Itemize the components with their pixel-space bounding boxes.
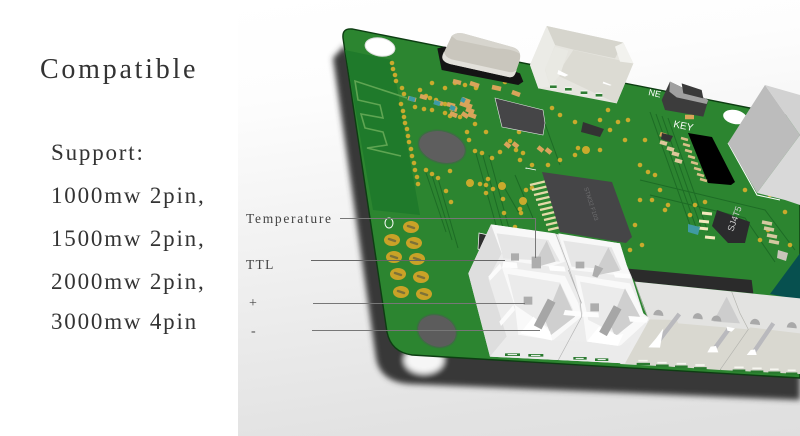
small pins xyxy=(511,253,599,311)
leader line: minus xyxy=(312,330,540,332)
SOIC marking text: SJ4T5 xyxy=(725,205,744,233)
socket D xyxy=(575,275,648,346)
QFP main chip xyxy=(526,168,632,243)
transistor black xyxy=(478,233,496,254)
gold vias xyxy=(392,62,790,250)
front band xyxy=(490,335,632,363)
crystal xyxy=(437,33,523,85)
crystal can top shade xyxy=(452,33,519,53)
gold pads xyxy=(384,221,432,300)
QFN chip xyxy=(495,98,545,135)
antenna keep-out area xyxy=(345,50,420,215)
beige connector row xyxy=(620,253,800,374)
socket A xyxy=(491,224,565,267)
long pins xyxy=(538,301,618,334)
chip marking text: STM32 F103 xyxy=(582,187,599,222)
net silkscreen text: NE xyxy=(648,87,662,100)
left face xyxy=(468,224,507,357)
item 1000mw: 1000mw 2pin, xyxy=(51,183,206,208)
block outline xyxy=(468,224,650,363)
cyan capacitors xyxy=(409,98,698,231)
item 1500mw: 1500mw 2pin, xyxy=(51,226,206,251)
metal disc upper xyxy=(415,125,469,169)
slots xyxy=(488,263,515,326)
divider lines xyxy=(623,282,748,370)
capacitor grey xyxy=(777,250,788,261)
large vias xyxy=(470,150,586,201)
antenna trace xyxy=(355,81,407,156)
crystal base xyxy=(437,47,523,85)
key silkscreen text: KEY xyxy=(672,119,695,134)
capacitor teal xyxy=(688,224,700,235)
silkscreen ring xyxy=(385,218,393,228)
inner wall xyxy=(713,297,740,323)
connector top surface xyxy=(620,282,800,373)
pin bases xyxy=(648,327,757,355)
notches xyxy=(653,310,797,328)
pads xyxy=(505,355,608,360)
label: TTL: TTL xyxy=(246,257,275,272)
black headers behind connectors xyxy=(625,268,753,293)
label: plus: + xyxy=(249,296,257,311)
support list xyxy=(51,140,206,334)
grey relay box xyxy=(728,85,800,205)
tactile button xyxy=(648,82,708,134)
crystal can xyxy=(442,33,520,77)
small resistors xyxy=(408,81,694,153)
label: minus: - xyxy=(251,324,256,339)
support heading: Support: xyxy=(51,140,145,165)
resistor column xyxy=(660,142,682,162)
item 2000mw: 2000mw 2pin, xyxy=(51,269,206,294)
crystal can rim xyxy=(442,52,517,77)
socket B xyxy=(558,233,630,277)
leader line: TTL xyxy=(311,260,505,262)
board shadow xyxy=(333,45,800,400)
pins xyxy=(657,314,773,352)
circuit board xyxy=(343,26,800,378)
connector face right xyxy=(721,327,800,374)
copper traces xyxy=(425,110,795,262)
pads xyxy=(637,361,797,374)
metal disc lower xyxy=(413,309,461,353)
leader line: plus xyxy=(313,302,525,304)
white silk line of box xyxy=(728,143,780,200)
connector pads xyxy=(550,87,602,95)
small SOT xyxy=(661,133,673,142)
white JST connector block xyxy=(468,224,650,363)
connector face left xyxy=(623,319,748,370)
SOT chip xyxy=(581,122,604,137)
mounting hole top right xyxy=(722,108,748,126)
SOP chip black xyxy=(681,133,735,185)
socket C xyxy=(502,267,582,340)
title: Compatible xyxy=(40,54,198,85)
board base xyxy=(343,29,800,378)
SOIC chip right xyxy=(698,205,750,243)
item 3000mw: 3000mw 4pin xyxy=(51,309,198,334)
teal module xyxy=(770,253,800,300)
mounting hole top left xyxy=(364,36,396,58)
socket dividers xyxy=(556,233,582,360)
label: Temperature: Temperature xyxy=(246,211,333,226)
latch tabs xyxy=(502,262,648,323)
leader line: Temperature xyxy=(340,218,536,258)
white connector top xyxy=(530,26,633,103)
resistor pack xyxy=(762,222,779,243)
